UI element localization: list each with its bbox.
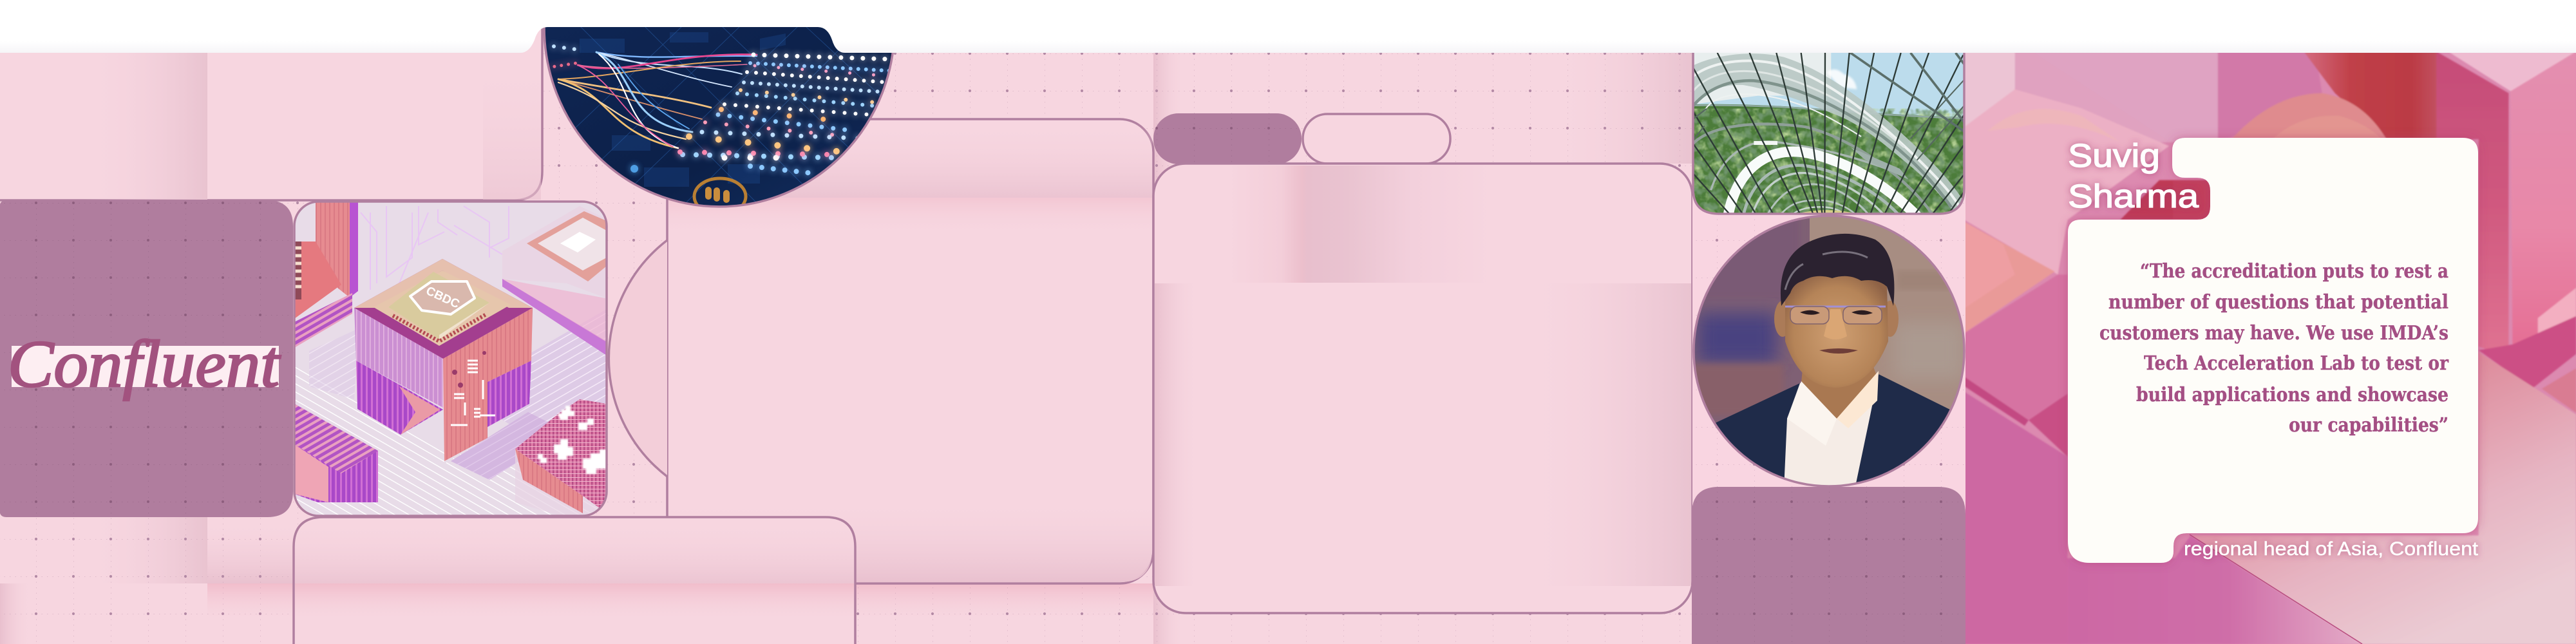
image: glass dome garden (1692, 53, 1965, 216)
image: half-circle data streams (541, 26, 898, 214)
eyes and mouth (1800, 310, 1873, 315)
fibre streams (558, 52, 757, 148)
logo highlight block (12, 346, 279, 387)
broad glass band (1692, 53, 1965, 213)
panel: top left rounded panel (0, 19, 542, 200)
image: isometric CBDC chip scene (294, 202, 607, 516)
white arc (1728, 151, 1917, 216)
face (1785, 272, 1888, 388)
arc behind chip image (609, 240, 667, 477)
chip (374, 270, 511, 346)
right column background (1692, 53, 1965, 644)
ears (1774, 301, 1785, 337)
collar (1787, 381, 1837, 446)
mid grey arc (1692, 124, 1932, 214)
chip label: CBDC (424, 284, 462, 312)
bottom right voxel block (515, 450, 598, 515)
neck (1801, 368, 1876, 419)
quote text: customers may have. We use IMDA’s (2099, 322, 2448, 345)
glasses (1785, 305, 1886, 308)
shirt (1784, 374, 1879, 489)
panel: centre large outlined panel (667, 119, 1153, 583)
heading: speaker name (2068, 137, 2199, 214)
portrait: Suvig Sharma (1687, 216, 1971, 489)
text: Confluent logo: Confluent (8, 327, 281, 401)
pill: filled tab (1153, 113, 1302, 164)
header white band (0, 0, 2576, 53)
quote text: our capabilities” (2289, 414, 2448, 437)
panel: right large outlined panel (1153, 164, 1692, 613)
background: abstract pink 3D shapes (1964, 52, 2576, 644)
pill: outlined tab (1303, 114, 1450, 164)
panel: bottom outlined panel (294, 517, 855, 644)
tower top left (316, 202, 350, 298)
heading: speaker name: Suvig (2068, 137, 2160, 174)
caption: speaker role: regional head of Asia, Confluent (2184, 538, 2479, 560)
coin emblem (693, 176, 747, 205)
ribs (1692, 53, 1965, 216)
quote text: number of questions that potential (2108, 291, 2448, 314)
panel: purple tile bottom right column (1692, 487, 1965, 644)
panel: Confluent logo tile (0, 200, 293, 517)
heading: speaker name: Sharma (2068, 178, 2199, 214)
light dots (547, 46, 892, 174)
central cube (356, 361, 443, 435)
hair (1781, 234, 1894, 306)
quote card (2068, 138, 2478, 563)
quote text: “The accreditation puts to rest a (2140, 260, 2448, 283)
quote text (2099, 260, 2449, 437)
quote text: build applications and showcase (2136, 384, 2448, 406)
quote text: Tech Acceleration Lab to test or (2144, 352, 2449, 375)
bottom left striped block (294, 404, 378, 502)
jacket (1716, 374, 1950, 482)
